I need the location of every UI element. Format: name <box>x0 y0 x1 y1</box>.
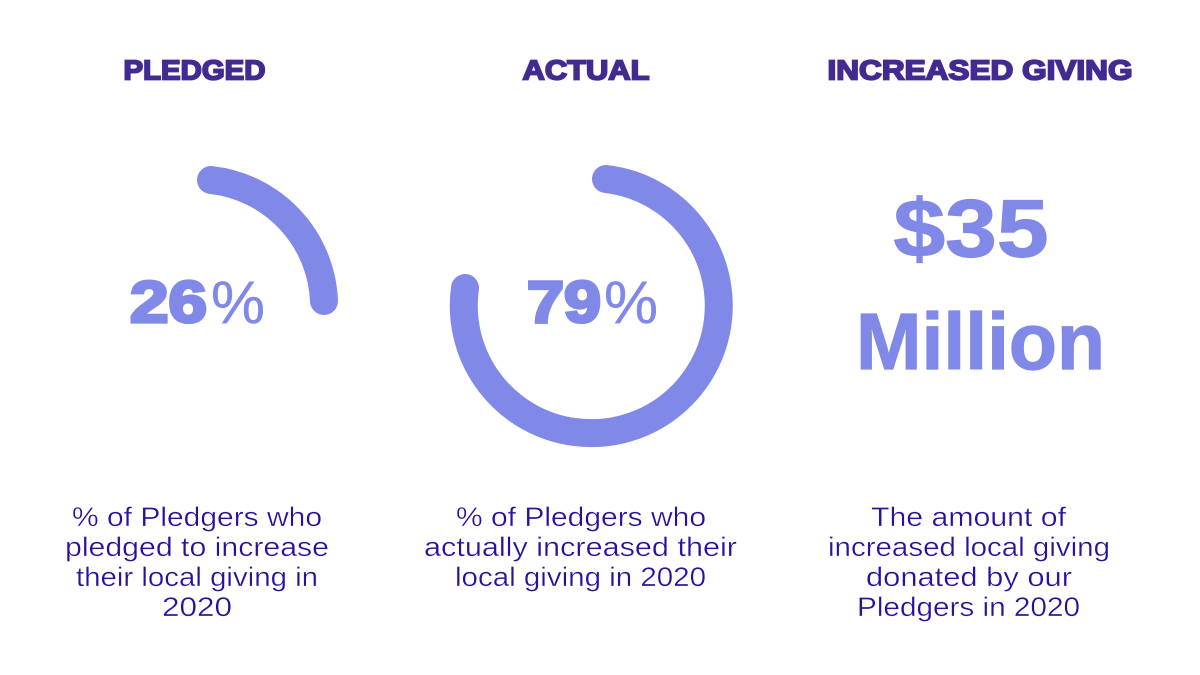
description: actual: local giving in 2020 <box>455 562 706 592</box>
chart: 26% arc <box>211 180 324 301</box>
value: 79%: % <box>604 269 658 336</box>
value: 79%: 79 <box>527 270 601 335</box>
value: 26%: % <box>211 269 265 336</box>
description: increased giving: increased local giving <box>828 532 1110 562</box>
description: pledged: pledged to increase <box>65 532 329 562</box>
value: $35 Million: $35 <box>894 184 1048 274</box>
description: increased giving: donated by our <box>866 562 1072 592</box>
description: increased giving: The amount of <box>871 502 1067 532</box>
description: pledged: % of Pledgers who <box>72 502 322 532</box>
description: pledged: their local giving in <box>76 562 318 592</box>
description: pledged <box>65 502 329 622</box>
value: $35 Million <box>856 184 1105 386</box>
description: actual: % of Pledgers who <box>456 502 706 532</box>
description: increased giving <box>828 502 1110 622</box>
value: $35 Million: Million <box>856 297 1105 386</box>
value: 26% <box>130 269 265 336</box>
panel: increased giving <box>828 54 1132 622</box>
description: increased giving: Pledgers in 2020 <box>857 592 1080 622</box>
panel: pledged <box>65 54 329 622</box>
chart: 79% arc <box>464 179 719 433</box>
value: 79% <box>527 269 658 336</box>
heading: increased giving: INCREASED GIVING <box>828 54 1132 86</box>
description: pledged: 2020 <box>162 592 232 622</box>
heading: pledged: PLEDGED <box>124 54 266 86</box>
panel: actual <box>424 54 737 592</box>
description: actual: actually increased their <box>424 532 737 562</box>
description: actual <box>424 502 737 592</box>
value: 26%: 26 <box>130 270 207 335</box>
heading: actual: ACTUAL <box>522 54 650 86</box>
